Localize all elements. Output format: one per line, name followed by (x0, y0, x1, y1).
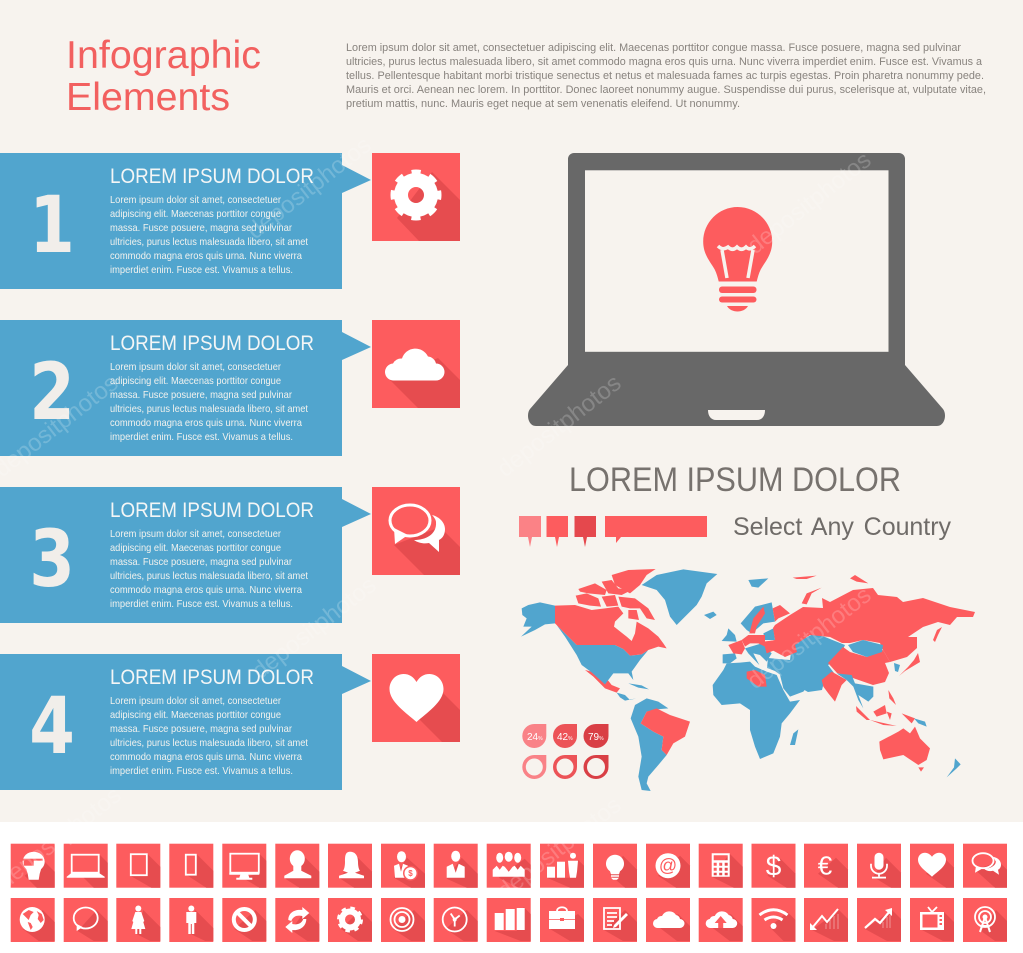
watermarks: depositphotos (742, 581, 876, 695)
watermarks: depositphotos (247, 571, 381, 685)
title (66, 34, 261, 119)
heading: map section: LOREM IPSUM DOLOR (569, 461, 901, 499)
panel: step 4: LOREM IPSUM DOLOR (110, 666, 314, 689)
panel: step 2: 2 (29, 346, 75, 437)
panel: step 1: 1 (29, 179, 75, 270)
panel: step 4: massa. Fusce posuere, magna sed pulvinar (110, 723, 292, 735)
icon: woman bust (328, 844, 372, 888)
percentage drops: 79% (588, 732, 604, 743)
legend speech bubbles (519, 516, 707, 547)
icon: chart down (804, 898, 848, 942)
icon: target (381, 898, 425, 942)
icon: group of people (487, 844, 531, 888)
icon: heart (910, 844, 954, 888)
title: Elements (66, 76, 230, 119)
icon: tablet (116, 844, 160, 888)
icon: clock dial (434, 898, 478, 942)
south east asia and oceania (822, 672, 961, 777)
europe and scandinavia (722, 575, 868, 665)
panel: step 1: LOREM IPSUM DOLOR (110, 165, 314, 188)
icon: chat (963, 844, 1007, 888)
intro text block: pretium mattis, nunc. Mauris eget neque at sem venenatis eleifend. Ut nonummy. (346, 98, 740, 110)
panel: step 2: commodo magna eros quis urna. Nunc viverra (110, 417, 302, 429)
watermarks: depositphotos (242, 131, 376, 245)
panel: step 3: imperdiet enim. Fusce est. Vivamus a tellus. (110, 598, 293, 610)
panel: step 3: 3 (29, 513, 75, 604)
icon: businessman (434, 844, 478, 888)
icon: chart up (857, 898, 901, 942)
panel: step 2: imperdiet enim. Fusce est. Vivamus a tellus. (110, 431, 293, 443)
icon: cloud upload (699, 898, 743, 942)
world map (521, 569, 975, 791)
icon row 1 (11, 844, 1007, 888)
icon: man bust (275, 844, 319, 888)
title: Infographic (66, 34, 261, 77)
panel: step 2: adipiscing elit. Maecenas porttitor congue (110, 375, 281, 387)
icon: cloud (646, 898, 690, 942)
icon row 2 (11, 898, 1007, 942)
watermarks: depositphotos (742, 146, 876, 260)
panel: step 2 (0, 320, 371, 456)
icon: bulb (593, 844, 637, 888)
watermarks: depositphotos (492, 791, 626, 905)
panel: step 1: adipiscing elit. Maecenas porttitor congue (110, 208, 281, 220)
intro text block: Lorem ipsum dolor sit amet, consectetuer adipiscing elit. Maecenas porttitor congue massa. Fusce posuere, magna sed pulvinar (346, 42, 961, 54)
icon: refresh (275, 898, 319, 942)
panel: step 3 (0, 487, 371, 623)
icon: at sign (646, 844, 690, 888)
panel: step 3: massa. Fusce posuere, magna sed pulvinar (110, 556, 292, 568)
percentage drops (522, 724, 608, 779)
icon: prohibited (222, 898, 266, 942)
laptop with bulb (528, 153, 945, 426)
icon: briefcase (540, 898, 584, 942)
panel: step 3: adipiscing elit. Maecenas porttitor congue (110, 542, 281, 554)
intro text block: ultricies, purus lectus malesuada libero, sit amet commodo magna eros quis urna. Nunc viverra imperdiet enim. Fusce est. Vivamus a (346, 56, 983, 68)
panel: step 1: imperdiet enim. Fusce est. Vivamus a tellus. (110, 264, 293, 276)
panel: step 3: LOREM IPSUM DOLOR (110, 499, 314, 522)
icon: laptop (64, 844, 108, 888)
icon: calculator (699, 844, 743, 888)
icon: wifi (752, 898, 796, 942)
panel: step 3: commodo magna eros quis urna. Nunc viverra (110, 584, 302, 596)
panel: step 1: massa. Fusce posuere, magna sed pulvinar (110, 222, 292, 234)
icon: head with glasses (11, 844, 55, 888)
panel: step 1: commodo magna eros quis urna. Nunc viverra (110, 250, 302, 262)
icon: gear tile (372, 153, 460, 241)
panel: step 3: ultricies, purus lectus malesuada libero, sit amet (110, 570, 308, 582)
panel: step 4: ultricies, purus lectus malesuada libero, sit amet (110, 737, 308, 749)
icon: woman figure (116, 898, 160, 942)
icon: microphone (857, 844, 901, 888)
panel: step 2: ultricies, purus lectus malesuada libero, sit amet (110, 403, 308, 415)
panel: step 2: massa. Fusce posuere, magna sed pulvinar (110, 389, 292, 401)
panel: step 1 (0, 153, 371, 289)
asia (765, 588, 975, 692)
panel: step 2: Lorem ipsum dolor sit amet, consectetuer (110, 361, 281, 373)
watermarks: depositphotos (492, 369, 626, 483)
percentage drops: 42% (557, 732, 573, 743)
icon: dollar: $ (766, 851, 782, 882)
icon: speech bubble (64, 898, 108, 942)
icon: heart tile (372, 654, 460, 742)
icon: dollar (752, 844, 796, 888)
icon: binders (487, 898, 531, 942)
intro text block: Mauris et orci. Aenean nec lorem. In porttitor. Donec laoreet nonummy augue. Suspendisse dui purus, scelerisque at, vulputate vitae, (346, 84, 986, 96)
icon: bars and person (540, 844, 584, 888)
panel: step 4: adipiscing elit. Maecenas porttitor congue (110, 709, 281, 721)
panel: step 1: Lorem ipsum dolor sit amet, consectetuer (110, 194, 281, 206)
watermarks (0, 131, 876, 905)
icon: man with dollar coin (381, 844, 425, 888)
select any country label: Select Any Country (733, 513, 952, 541)
icon: television (910, 898, 954, 942)
icon: euro: € (818, 851, 833, 881)
icon: phone (169, 844, 213, 888)
icon: man figure (169, 898, 213, 942)
icon: antenna (963, 898, 1007, 942)
north america (521, 569, 667, 684)
percentage drops: 24% (527, 732, 543, 743)
icon: globe (11, 898, 55, 942)
icon: gear (328, 898, 372, 942)
icon: man with dollar coin: $ (408, 869, 413, 878)
panel: step 4: commodo magna eros quis urna. Nunc viverra (110, 751, 302, 763)
panel: step 4: 4 (29, 680, 75, 771)
panel: step 3: Lorem ipsum dolor sit amet, consectetuer (110, 528, 281, 540)
icon: chat bubbles tile (372, 487, 460, 575)
icon: light bulb (703, 207, 772, 312)
icon: euro (804, 844, 848, 888)
panel: step 2: LOREM IPSUM DOLOR (110, 332, 314, 355)
icon: cloud tile (372, 320, 460, 408)
icon: at sign: @ (659, 856, 677, 876)
panel: step 4: imperdiet enim. Fusce est. Vivamus a tellus. (110, 765, 293, 777)
panel: step 4 (0, 654, 371, 790)
icon: monitor (222, 844, 266, 888)
icon: document and pen (593, 898, 637, 942)
intro text block: tellus. Pellentesque habitant morbi tristique senectus et netus et malesuada fames ac turpis egestas. Proin pharetra nonummy pede. (346, 70, 984, 82)
panel: step 4: Lorem ipsum dolor sit amet, consectetuer (110, 695, 281, 707)
americas, africa and greenland (585, 569, 810, 791)
intro text block (346, 42, 986, 110)
panel: step 1: ultricies, purus lectus malesuada libero, sit amet (110, 236, 308, 248)
